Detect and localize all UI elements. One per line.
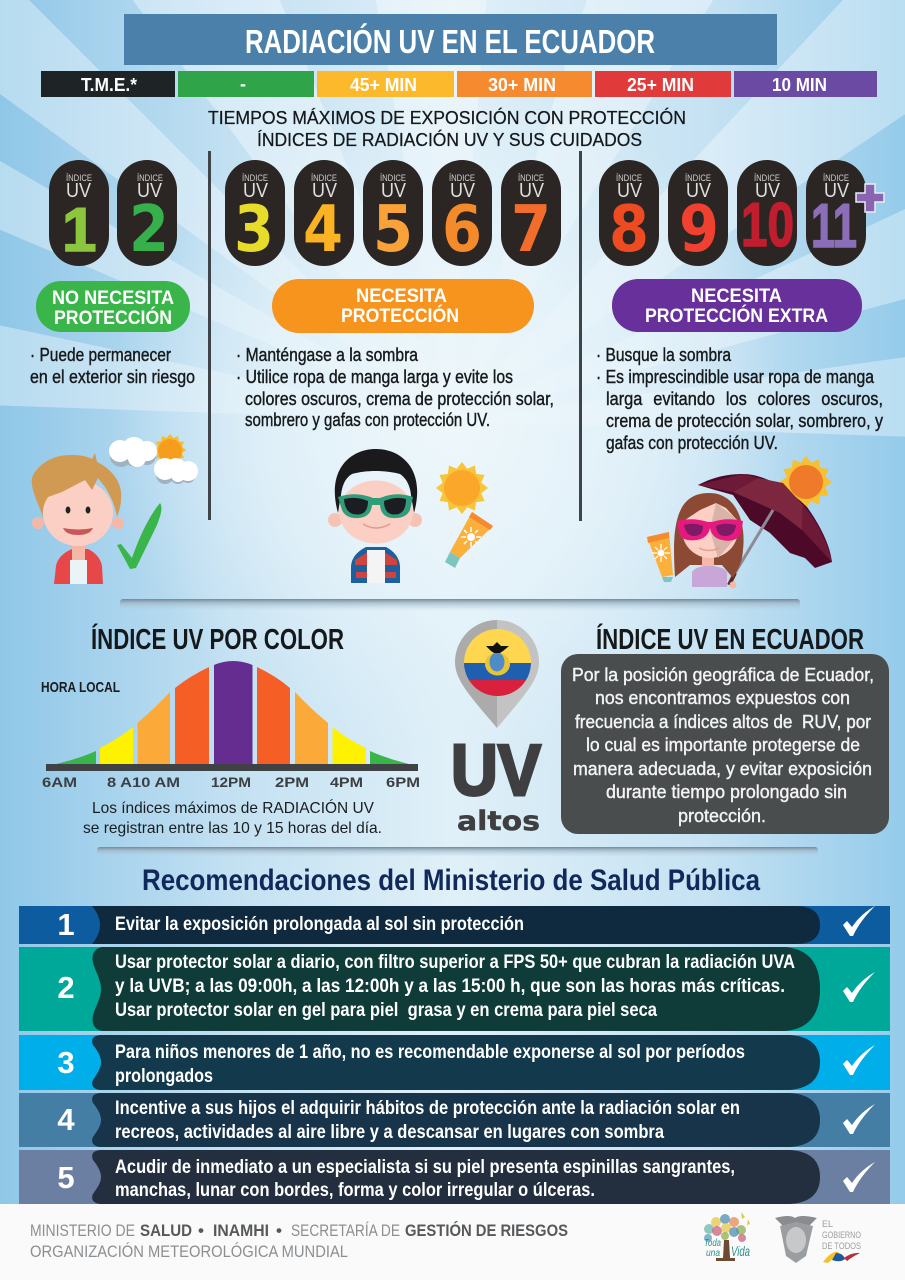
panel: uv in ecuador text box: protección. — [678, 805, 766, 826]
advice text: en el exterior sin riesgo — [30, 367, 195, 387]
recommendation 4: Incentive a sus hijos el adquirir hábitos de protección ante la radiación solar en — [115, 1098, 740, 1119]
uv index pill 1: ÍNDICE — [66, 173, 92, 184]
uv index pill 2: 2 — [129, 193, 169, 267]
uv index pill 1: 1 — [62, 196, 96, 265]
uv index pill 9: UV — [686, 180, 712, 202]
recommendation 1 — [19, 906, 890, 944]
institutions text: INAMHI — [213, 1221, 269, 1240]
panel: uv in ecuador text box: Por la posición geográfica de Ecuador, — [572, 664, 874, 685]
exposure time bar: 25+ MIN — [627, 75, 694, 95]
uv index pill 10: UV — [755, 180, 781, 202]
label: no necesita protección: PROTECCIÓN — [54, 307, 172, 329]
icon: sun — [436, 462, 488, 514]
chart note: se registran entre las 10 y 15 horas del día. — [83, 820, 382, 837]
chart: uv index by hour: 8 A10 AM — [107, 774, 180, 790]
uv index pill 6 — [432, 160, 492, 267]
institutions text — [30, 1221, 568, 1261]
institutions text: GESTIÓN DE RIESGOS — [405, 1221, 568, 1240]
advice text: gafas con protección UV. — [606, 433, 778, 453]
exposure time bar — [41, 71, 877, 97]
institutions text: • — [198, 1221, 204, 1240]
man body — [351, 547, 400, 583]
panel: protection — [225, 160, 561, 430]
uv index pill 8: 8 — [609, 193, 649, 267]
panel: no protection — [30, 160, 195, 387]
recommendation 1: Evitar la exposición prolongada al sol sin protección — [115, 914, 524, 935]
institutions text: • — [276, 1221, 282, 1240]
uv index pill 5: 5 — [373, 193, 413, 267]
uv index pill 3: ÍNDICE — [242, 173, 268, 184]
recommendation 4: 4 — [57, 1102, 75, 1137]
uv index pill 2: ÍNDICE — [137, 173, 163, 184]
uv index pill 7: ÍNDICE — [518, 173, 544, 184]
uv index pill 5: ÍNDICE — [380, 173, 406, 184]
recommendation 3 — [19, 1035, 890, 1090]
uv index pill 11 plus — [806, 160, 884, 266]
chart: uv index by hour: 4PM — [330, 774, 363, 790]
logo: el gobierno de todos: EL — [822, 1219, 833, 1229]
uv index pill 8: ÍNDICE — [616, 173, 642, 184]
uv index pill 7 — [501, 160, 561, 267]
uv index pill 11 plus: 11 — [811, 192, 857, 261]
panel: uv in ecuador text box: lo cual es importante protegerse de — [586, 734, 860, 755]
uv index pill 2 — [117, 160, 177, 267]
recommendation 5 — [19, 1150, 890, 1204]
uv index pill 11 plus: UV — [824, 180, 850, 202]
uv index pill 4: 4 — [303, 193, 343, 267]
chart: uv index by hour: 12PM — [211, 774, 251, 790]
boy head — [32, 453, 124, 546]
boy body — [54, 545, 103, 584]
recommendation 4: recreos, actividades al aire libre y a descansar en lugares con sombra — [115, 1122, 664, 1143]
uv index pill 1: UV — [66, 180, 92, 202]
label: necesita protección — [272, 279, 534, 333]
recommendation 5: manchas, lunar con bordes, forma y color irregular o úlceras. — [115, 1180, 595, 1201]
heading: recomendaciones: Recomendaciones del Ministerio de Salud Pública — [142, 864, 760, 897]
panel: extra protection — [596, 160, 884, 453]
uv index pill 8: UV — [617, 180, 643, 202]
uv index pill 5 — [363, 160, 423, 267]
chart: uv index by hour: 6PM — [386, 774, 420, 790]
recommendation 3: 3 — [57, 1045, 75, 1080]
label: necesita protección extra: PROTECCIÓN EXTRA — [645, 305, 828, 327]
label: necesita protección: NECESITA — [356, 286, 447, 307]
icon: ecuador map pin — [455, 620, 539, 728]
recommendation 5: Acudir de inmediato a un especialista si su piel presenta espinillas sangrantes, — [115, 1157, 735, 1178]
advice text: colores oscuros, crema de protección solar, — [245, 389, 554, 409]
uv index pill 6: UV — [450, 180, 476, 202]
icon: sunscreen tube — [647, 532, 673, 582]
exposure time bar: 45+ MIN — [350, 75, 417, 95]
uv index pill 10: ÍNDICE — [754, 173, 780, 184]
advice text — [596, 345, 883, 453]
recommendation 3: prolongados — [115, 1066, 213, 1087]
advice text: larga evitando los colores oscuros, — [606, 389, 883, 409]
exposure time bar: T.M.E.* — [81, 75, 137, 95]
recommendation 1: 1 — [57, 907, 75, 942]
title bar — [124, 14, 777, 65]
recommendation 2: Usar protector solar a diario, con filtro superior a FPS 50+ que cubran la radiación UVA — [115, 952, 795, 973]
uv index pill 4: ÍNDICE — [311, 173, 337, 184]
label: necesita protección extra — [612, 279, 862, 332]
illustration: boy with clouds and check — [32, 434, 198, 584]
uv index pill 4: UV — [312, 180, 338, 202]
logo: toda una vida tree — [704, 1212, 750, 1261]
logo: el gobierno de todos — [822, 1219, 861, 1263]
exposure time bar: 30+ MIN — [488, 75, 556, 95]
uv index pill 3: 3 — [234, 193, 274, 267]
recommendation 3: Para niños menores de 1 año, no es recomendable exponerse al sol por períodos — [115, 1042, 745, 1063]
recommendation 2: y la UVB; a las 09:00h, a las 12:00h y a las 15:00 h, que son las horas más críticas. — [115, 976, 785, 997]
chart: uv index by hour: HORA LOCAL — [41, 679, 120, 696]
icon: sun behind clouds — [109, 434, 198, 484]
recommendation 2 — [19, 947, 890, 1031]
subtitle: TIEMPOS MÁXIMOS DE EXPOSICIÓN CON PROTECCIÓN — [208, 107, 686, 128]
uv index pill 10 — [737, 160, 797, 266]
institutions text: SALUD — [140, 1221, 192, 1240]
footer — [0, 1204, 905, 1280]
uv altos logo — [451, 731, 541, 837]
recommendation 2: 2 — [57, 970, 75, 1005]
panel: uv in ecuador text box — [561, 654, 889, 834]
chart: uv index by hour: 2PM — [275, 774, 309, 790]
panel: uv in ecuador text box: nos encontramos expuestos con — [595, 687, 850, 708]
uv index pill 4 — [294, 160, 354, 267]
logo: toda una vida tree: una — [706, 1248, 720, 1259]
uv index pill 2: UV — [137, 180, 163, 202]
uv index pill 3 — [225, 160, 285, 267]
uv index pill 3: UV — [243, 180, 269, 202]
institutions text: SECRETARÍA DE — [291, 1221, 400, 1240]
panel: uv in ecuador text box: frecuencia a índices altos de RUV, por — [575, 711, 871, 732]
uv index pill 11 plus: ÍNDICE — [823, 173, 849, 184]
advice text: · Utilice ropa de manga larga y evite los — [236, 367, 513, 387]
title bar: RADIACIÓN UV EN EL ECUADOR — [245, 23, 655, 60]
uv index pill 10: 10 — [741, 191, 794, 260]
uv index pill 5: UV — [381, 180, 407, 202]
uv altos logo: UV — [451, 731, 541, 811]
chart note — [83, 798, 382, 837]
logo: toda una vida tree: Vida — [731, 1243, 750, 1259]
label: necesita protección: PROTECCIÓN — [341, 305, 459, 327]
chart: uv index by hour — [41, 661, 420, 790]
illustration: girl with umbrella — [647, 456, 832, 588]
chart note: Los índices máximos de RADIACIÓN UV — [92, 798, 374, 817]
logo: toda una vida tree: Toda — [704, 1238, 721, 1249]
logo: el gobierno de todos: DE TODOS — [822, 1241, 861, 1251]
uv altos logo: altos — [457, 806, 540, 837]
advice text: · Es imprescindible usar ropa de manga — [596, 367, 875, 387]
subtitle: ÍNDICES DE RADIACIÓN UV Y SUS CUIDADOS — [257, 129, 642, 150]
uv index pill 8 — [599, 160, 659, 267]
uv index pill 9: 9 — [679, 193, 719, 267]
uv index pill 7: UV — [519, 180, 545, 202]
illustration: man with sunglasses — [328, 449, 493, 583]
advice text — [30, 345, 195, 387]
advice text — [236, 345, 554, 430]
logo: el gobierno de todos: GOBIERNO — [822, 1230, 861, 1240]
logo: ecuador coat of arms — [775, 1216, 817, 1263]
advice text: · Manténgase a la sombra — [236, 345, 419, 365]
icon: umbrella — [698, 474, 832, 588]
girl — [674, 493, 744, 587]
icon: green check — [117, 503, 161, 569]
recommendation 4 — [19, 1093, 890, 1147]
uv index pill 9 — [668, 160, 728, 267]
advice text: · Busque la sombra — [596, 345, 732, 365]
subtitle — [208, 107, 686, 150]
recommendation 2: Usar protector solar en gel para piel grasa y en crema para piel seca — [115, 1000, 657, 1021]
institutions text: MINISTERIO DE — [30, 1221, 135, 1240]
chart: uv index by hour: 6AM — [42, 774, 77, 790]
heading: índice uv por color: ÍNDICE UV POR COLOR — [91, 622, 344, 656]
uv index pill 6: 6 — [442, 193, 482, 267]
panel: uv in ecuador text box: manera adecuada, y evitar exposición — [573, 758, 872, 779]
recommendation 5: 5 — [57, 1160, 75, 1195]
uv index pill 1 — [49, 160, 109, 266]
label: no necesita protección — [36, 281, 190, 332]
icon: sun — [780, 456, 832, 508]
label: necesita protección extra: NECESITA — [691, 286, 782, 307]
panel: uv in ecuador text box: durante tiempo prolongado sin — [606, 781, 847, 802]
exposure time bar: - — [240, 74, 246, 94]
institutions text: ORGANIZACIÓN METEOROLÓGICA MUNDIAL — [30, 1242, 348, 1261]
man head — [328, 449, 422, 544]
advice text: sombrero y gafas con protección UV. — [245, 410, 490, 430]
uv index pill 6: ÍNDICE — [449, 173, 475, 184]
exposure time bar: 10 MIN — [772, 75, 827, 95]
uv index pill 9: ÍNDICE — [685, 173, 711, 184]
icon: sunscreen tube — [445, 512, 493, 568]
uv index pill 7: 7 — [511, 193, 551, 267]
advice text: · Puede permanecer — [30, 345, 171, 365]
label: no necesita protección: NO NECESITA — [52, 288, 174, 309]
